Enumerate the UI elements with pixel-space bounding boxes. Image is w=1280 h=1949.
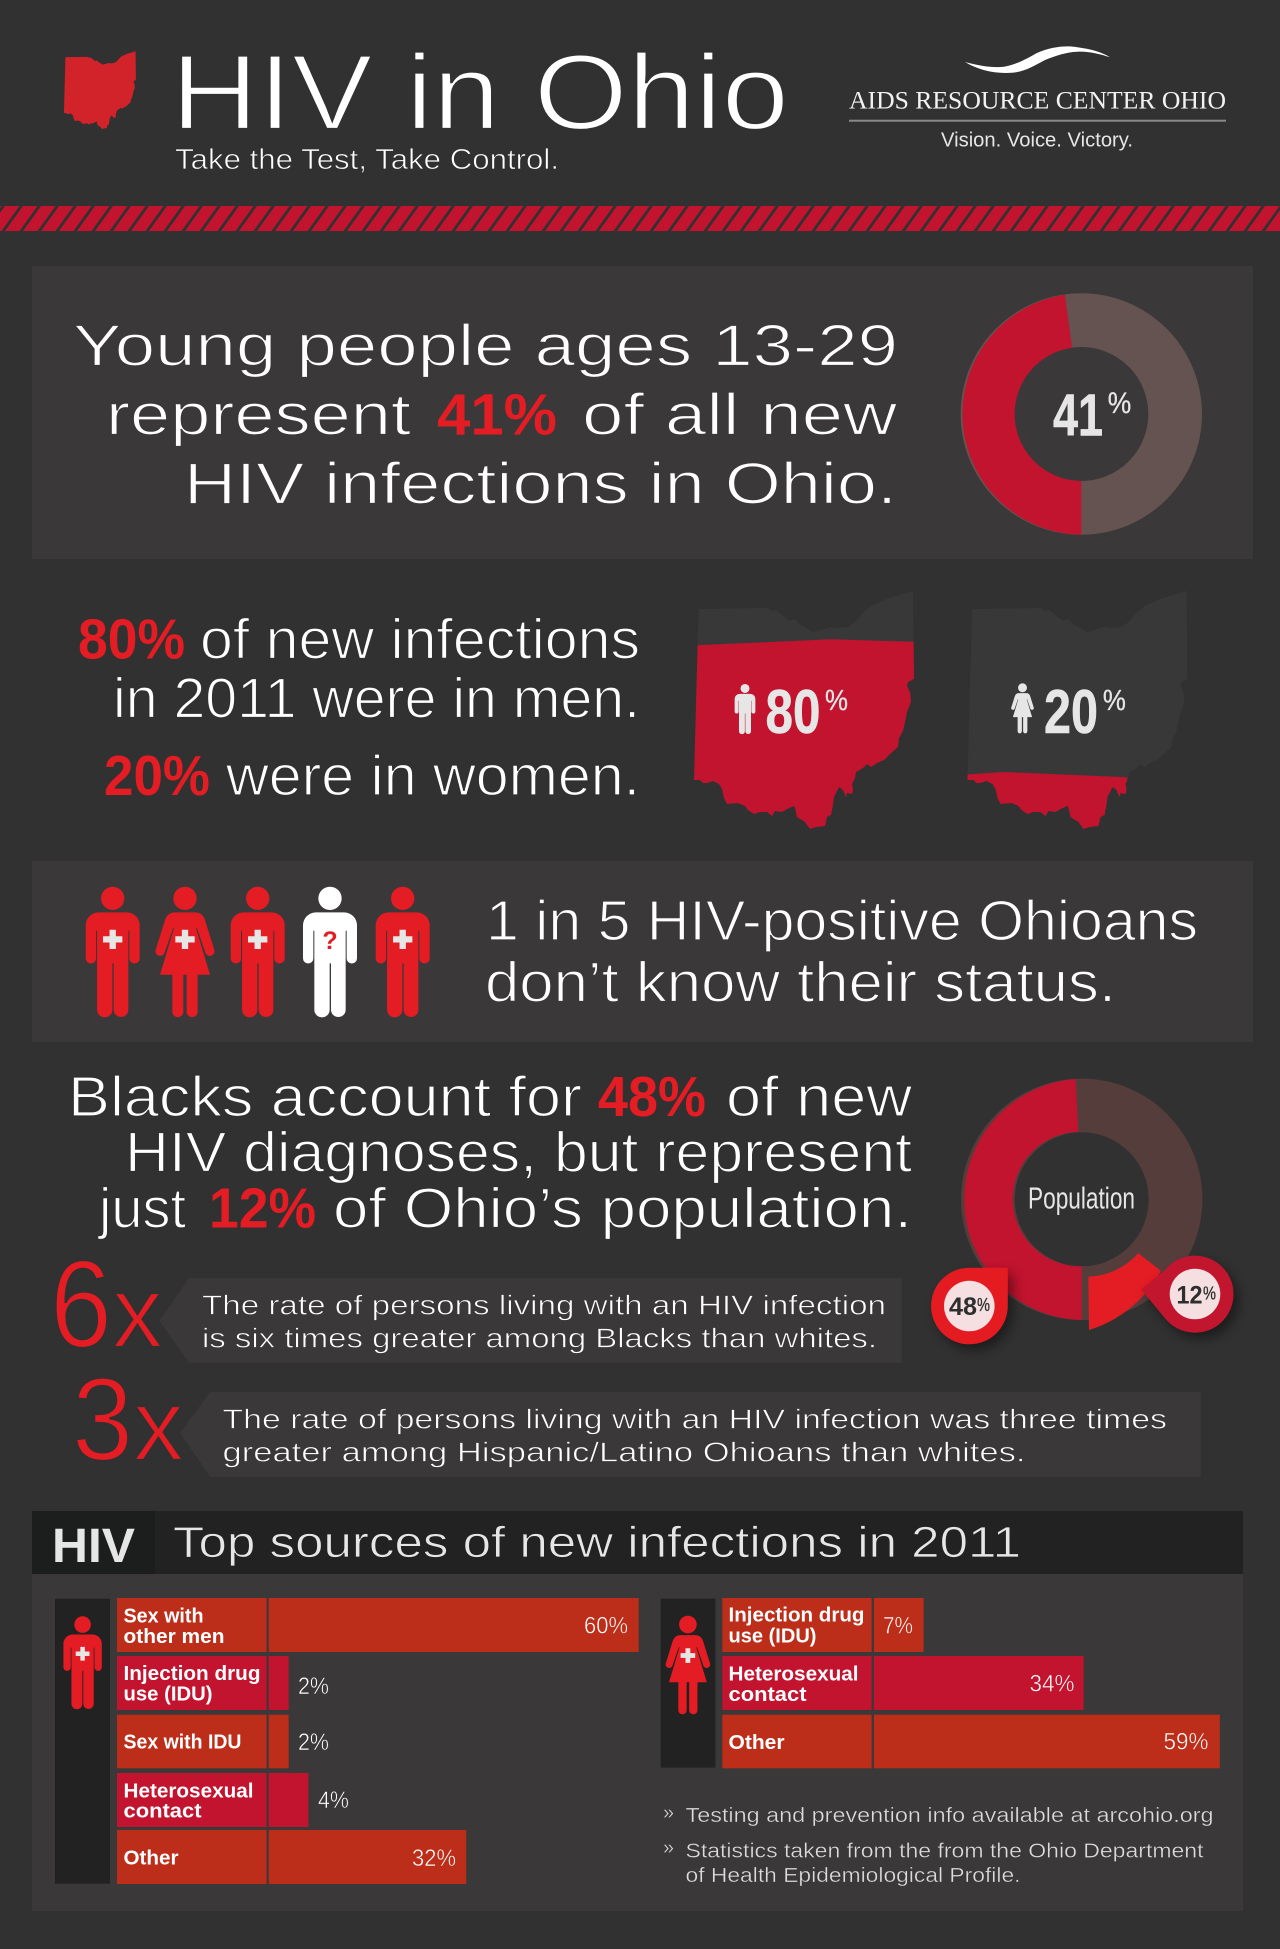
map: Ohio 20% women xyxy=(968,683,1127,829)
stat: 6x xyxy=(50,1236,902,1374)
stat: 3x: x xyxy=(133,1368,184,1482)
icon: woman xyxy=(666,1616,710,1714)
callout: 12% pin: 12 xyxy=(1176,1281,1202,1309)
bar: heterosexual contact 4% xyxy=(117,1773,349,1827)
text block: notes: » xyxy=(663,1837,674,1859)
bar chart: men xyxy=(55,1598,639,1884)
text block: notes: Statistics taken from the from the Ohio Department xyxy=(686,1840,1204,1862)
bar: injection drug use 2% xyxy=(117,1656,329,1710)
heading bar xyxy=(32,1511,1243,1574)
bar: heterosexual contact 34% xyxy=(722,1656,1084,1710)
icon: man xyxy=(63,1616,102,1709)
bar: other 32%: Other xyxy=(124,1848,179,1870)
text block: gender split: of new infections xyxy=(200,608,640,672)
text block: Blacks diagnoses: 48% xyxy=(598,1065,706,1129)
map: Ohio 20% women: % xyxy=(1103,685,1126,717)
bar: injection drug use 7%: 7% xyxy=(883,1613,913,1640)
bar: sex with IDU 2% xyxy=(117,1715,329,1768)
callout: 48% pin: % xyxy=(977,1295,990,1315)
text block: notes: Testing and prevention info available at arcohio.org xyxy=(686,1805,1214,1827)
bar: other 32% xyxy=(117,1830,466,1884)
text block: young people statement: Young people ages 13-29 xyxy=(73,314,898,379)
text block: young people statement: of all new xyxy=(582,383,898,448)
donut chart: population: Population xyxy=(1028,1180,1135,1215)
callout: six times xyxy=(159,1278,902,1363)
stat: 3x: 3 xyxy=(72,1354,133,1486)
bar: heterosexual contact 34%: Heterosexual xyxy=(728,1663,858,1685)
text block: Blacks diagnoses: just xyxy=(97,1176,186,1240)
text block: gender split xyxy=(78,608,640,808)
heading bar: HIV xyxy=(52,1520,135,1573)
text block: Blacks diagnoses: of Ohio’s population. xyxy=(333,1176,912,1240)
icon: woman xyxy=(1011,683,1034,733)
callout: 48% pin xyxy=(931,1268,1008,1344)
callout: three times: The rate of persons living with an HIV infection was three times xyxy=(222,1403,1167,1434)
logo: AIDS Resource Center Ohio xyxy=(849,46,1226,152)
bar: injection drug use 2%: 2% xyxy=(298,1673,329,1700)
donut chart: 41%: % xyxy=(1108,387,1131,420)
bar: sex with other men 60%: other men xyxy=(124,1626,224,1648)
text block: Blacks diagnoses: of new xyxy=(726,1065,913,1129)
logo: AIDS Resource Center Ohio: AIDS RESOURCE CENTER OHIO xyxy=(849,88,1226,115)
title: HIV in Ohio xyxy=(171,32,789,152)
donut chart: population xyxy=(931,1079,1233,1344)
text block: young people statement: HIV infections in Ohio. xyxy=(184,451,897,516)
donut chart: 41% xyxy=(963,295,1175,535)
bar chart: women xyxy=(661,1598,1220,1768)
bar: injection drug use 2%: use (IDU) xyxy=(124,1684,212,1706)
icons: five people: ? xyxy=(322,927,338,955)
callout: three times: greater among Hispanic/Latino Ohioans than whites. xyxy=(222,1437,1026,1468)
callout: six times: The rate of persons living with an HIV infection xyxy=(202,1289,886,1320)
bar: sex with IDU 2%: Sex with IDU xyxy=(124,1732,242,1754)
bar: sex with other men 60%: Sex with xyxy=(124,1606,204,1628)
bar: heterosexual contact 34%: contact xyxy=(728,1684,807,1706)
callout: 48% pin: 48 xyxy=(949,1293,977,1321)
text block: Blacks diagnoses: 12% xyxy=(209,1176,316,1240)
callout: three times xyxy=(180,1392,1201,1477)
text block: gender split: 20% xyxy=(104,744,210,808)
text block: status statement xyxy=(485,889,1198,1014)
panel: top sources of new infections xyxy=(32,1511,1243,1911)
bar: sex with other men 60%: 60% xyxy=(584,1612,628,1639)
text block: gender split: 80% xyxy=(78,608,185,672)
bar: heterosexual contact 4%: Heterosexual xyxy=(124,1780,254,1802)
bar: other 59%: Other xyxy=(728,1732,785,1754)
callout: six times: is six times greater among Blacks than whites. xyxy=(202,1323,877,1354)
text block: Blacks diagnoses xyxy=(68,1065,913,1240)
text block: notes: of Health Epidemiological Profile. xyxy=(686,1865,1020,1887)
bar: heterosexual contact 4%: contact xyxy=(124,1800,202,1822)
logo: AIDS Resource Center Ohio: Vision. Voice. Victory. xyxy=(941,130,1133,152)
heading bar: Top sources of new infections in 2011 xyxy=(173,1518,1021,1567)
donut chart: 41%: 41 xyxy=(1053,383,1103,449)
bar: sex with other men 60% xyxy=(117,1598,639,1652)
text block: young people statement: 41% xyxy=(437,383,557,448)
text block: status statement: don’t know their status. xyxy=(485,950,1116,1014)
panel: 1 in 5 status xyxy=(32,861,1253,1042)
icons: five people xyxy=(86,887,430,1017)
bar: other 32%: 32% xyxy=(412,1845,456,1872)
map: Ohio 80% men: % xyxy=(825,685,848,717)
map: Ohio 80% men: 80 xyxy=(766,678,820,747)
bar: other 59% xyxy=(722,1715,1220,1768)
map: Ohio 80% men xyxy=(694,639,914,829)
bar: heterosexual contact 4%: 4% xyxy=(318,1787,349,1814)
text block: Blacks diagnoses: Blacks account for xyxy=(68,1065,582,1129)
bar: injection drug use 7% xyxy=(722,1598,924,1652)
bar: sex with IDU 2%: 2% xyxy=(298,1729,329,1756)
stat: 6x: 6 xyxy=(50,1236,112,1374)
text block: notes xyxy=(663,1802,1214,1887)
bar: other 59%: 59% xyxy=(1164,1729,1208,1756)
text block: status statement: 1 in 5 HIV-positive Ohioans xyxy=(486,889,1198,953)
text block: Blacks diagnoses: HIV diagnoses, but represent xyxy=(125,1120,912,1184)
text block: young people statement: represent xyxy=(106,383,411,448)
stat: 6x: x xyxy=(112,1255,163,1369)
text block: gender split: in 2011 were in men. xyxy=(113,666,640,730)
text block: gender split: were in women. xyxy=(225,744,640,808)
bar: injection drug use 7%: Injection drug xyxy=(728,1605,864,1627)
subtitle: Take the Test, Take Control. xyxy=(175,144,559,176)
icon: red Ohio state xyxy=(64,51,136,129)
panel: young people 41% xyxy=(32,266,1253,559)
header xyxy=(64,32,1226,176)
text block: notes: » xyxy=(663,1802,674,1824)
callout: 12% pin xyxy=(1141,1256,1233,1333)
bar: injection drug use 7%: use (IDU) xyxy=(728,1625,816,1647)
stat: 3x xyxy=(72,1354,1201,1486)
bar: heterosexual contact 34%: 34% xyxy=(1030,1671,1074,1698)
bar: injection drug use 2%: Injection drug xyxy=(124,1663,260,1685)
text block: young people statement xyxy=(73,314,898,516)
map: Ohio 20% women: 20 xyxy=(1044,678,1098,747)
callout: 12% pin: % xyxy=(1203,1284,1216,1304)
icon: man xyxy=(735,684,755,734)
